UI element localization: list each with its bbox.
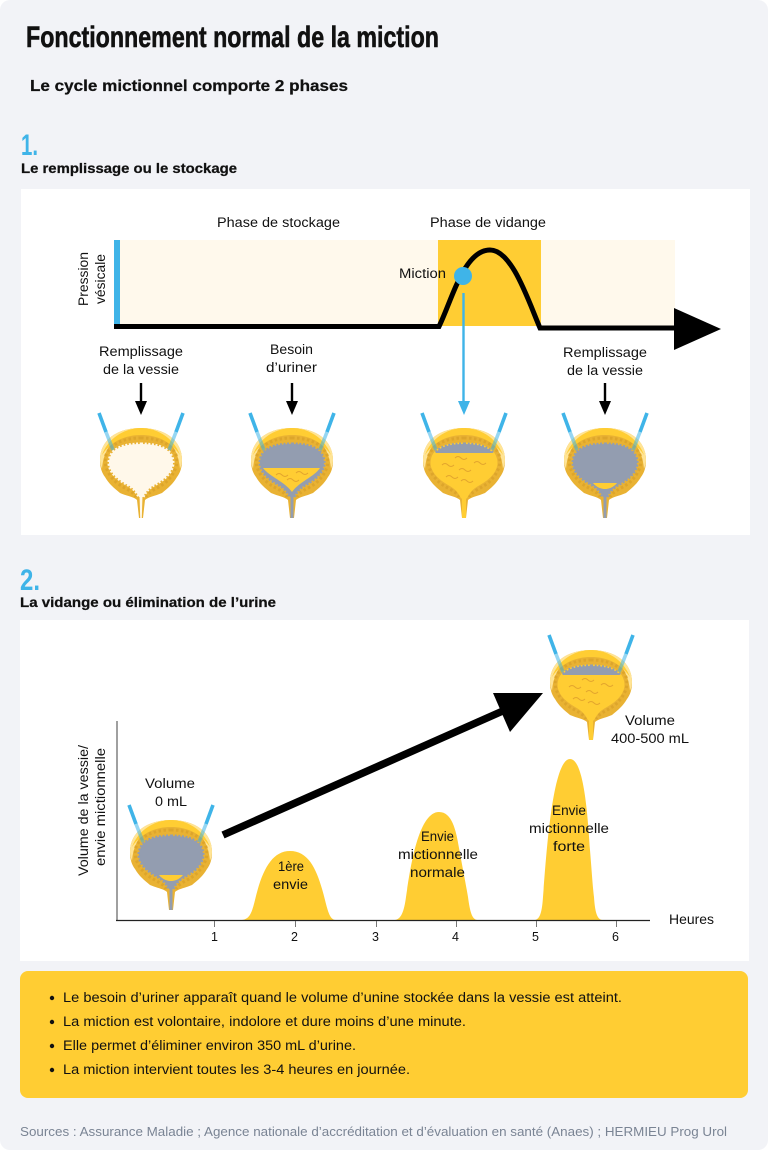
icon: empty bladder: [99, 413, 183, 518]
pressure chart: Phase de stockage: [217, 215, 340, 230]
label: filling of the bladder, right: [563, 345, 647, 378]
chart axes: 1: [211, 930, 218, 944]
label: volume 0 mL: Volume: [145, 776, 195, 791]
hump: strong urge: forte: [553, 839, 585, 854]
panel: voiding chart: [20, 620, 749, 961]
label: filling of the bladder, right: Remplissage: [563, 345, 647, 360]
chart axes: 3: [372, 930, 379, 944]
hump: strong urge: mictionnelle: [529, 821, 609, 836]
label: volume 400-500 mL: Volume: [625, 713, 675, 728]
heading: section 1: Le remplissage ou le stockage: [21, 160, 237, 176]
chart axes: 4: [452, 930, 459, 944]
hump: normal urge: mictionnelle: [398, 847, 478, 862]
callout: key facts: La miction est volontaire, indolore et dure moins d’une minute.: [63, 1014, 466, 1029]
callout: key facts: La miction intervient toutes les 3-4 heures en journée.: [63, 1062, 410, 1077]
chart axes: [76, 721, 714, 944]
panel: filling and storage: [21, 189, 750, 535]
label: need to urinate: [266, 342, 318, 375]
hump: first urge: envie: [273, 877, 308, 892]
pressure chart: Miction: [399, 266, 446, 281]
icon: empty bladder at start: [129, 805, 213, 910]
icon: half-full bladder: [250, 413, 334, 518]
hump: normal urge: normale: [410, 865, 465, 880]
icon: emptied bladder: [563, 413, 647, 518]
heading: section 2: La vidange ou élimination de l’urine: [20, 594, 276, 610]
hump: first urge: 1ère: [278, 859, 304, 874]
label: filling of the bladder, right: de la vessie: [567, 363, 643, 378]
label: volume 0 mL: [145, 776, 195, 809]
hump: first urge: [242, 851, 335, 920]
pressure chart: vésicale: [93, 254, 108, 304]
label: need to urinate: d’uriner: [266, 360, 318, 375]
arrow: blue from miction to bladder: [458, 293, 470, 415]
heading: section 2: 2.: [20, 564, 40, 597]
icon: full bladder: [422, 413, 506, 518]
chart axes: envie mictionnelle: [93, 748, 108, 866]
label: filling of the bladder, left: Remplissage: [99, 344, 183, 359]
arrow: black down 2: [286, 383, 298, 415]
icon: full bladder at end: [549, 635, 633, 740]
chart axes: 2: [291, 930, 298, 944]
hump: strong urge: [529, 759, 609, 920]
label: volume 400-500 mL: 400-500 mL: [611, 731, 690, 746]
hump: normal urge: [395, 812, 478, 920]
title: Fonctionnement normal de la miction: [26, 21, 439, 54]
arrow: black down 1: [135, 383, 147, 415]
arrow: black down 3: [599, 383, 611, 415]
pressure chart: Phase de vidange: [430, 215, 546, 230]
hump: strong urge: Envie: [552, 803, 586, 818]
label: need to urinate: Besoin: [270, 342, 313, 357]
callout: key facts: [20, 971, 748, 1098]
heading: section 1: [21, 129, 237, 176]
chart axes: 5: [532, 930, 539, 944]
callout: key facts: Elle permet d’éliminer environ 350 mL d’urine.: [63, 1038, 356, 1053]
label: volume 400-500 mL: [611, 713, 690, 746]
subtitle: Le cycle mictionnel comporte 2 phases: [30, 78, 348, 95]
chart axes: Volume de la vessie/: [76, 745, 91, 876]
label: filling of the bladder, left: [99, 344, 183, 377]
pressure chart: Pression: [76, 252, 91, 306]
sources: Sources : Assurance Maladie ; Agence nationale d’accréditation et d’évaluation en santé (Anaes) ; HERMIEU Prog Urol: [20, 1125, 727, 1139]
heading: section 2: [20, 564, 276, 610]
chart axes: Heures: [669, 912, 714, 927]
heading: section 1: 1.: [21, 129, 38, 162]
arrow: big black rising: [223, 693, 543, 835]
label: volume 0 mL: 0 mL: [155, 794, 188, 809]
hump: normal urge: Envie: [421, 829, 454, 844]
label: filling of the bladder, left: de la vessie: [103, 362, 179, 377]
pressure chart: [76, 215, 721, 350]
callout: key facts: Le besoin d’uriner apparaît quand le volume d’unine stockée dans la vessie est atteint.: [63, 990, 622, 1005]
chart axes: 6: [612, 930, 619, 944]
